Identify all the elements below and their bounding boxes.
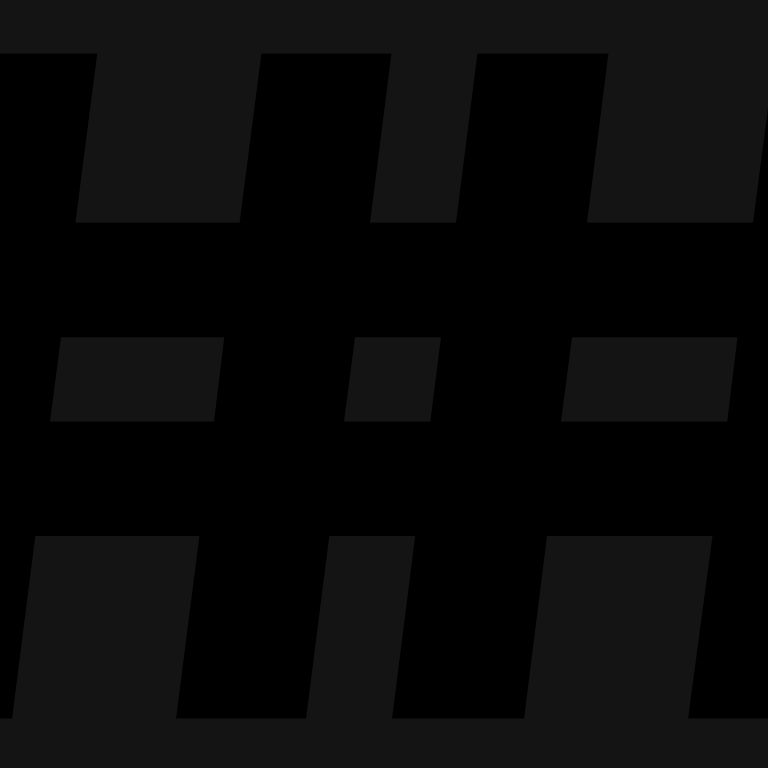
row 1 of parallelograms xyxy=(75,53,768,223)
row 3 of parallelograms xyxy=(12,536,712,719)
bottom band xyxy=(0,718,768,768)
row 2 of parallelograms xyxy=(50,337,738,422)
top band xyxy=(0,0,768,54)
